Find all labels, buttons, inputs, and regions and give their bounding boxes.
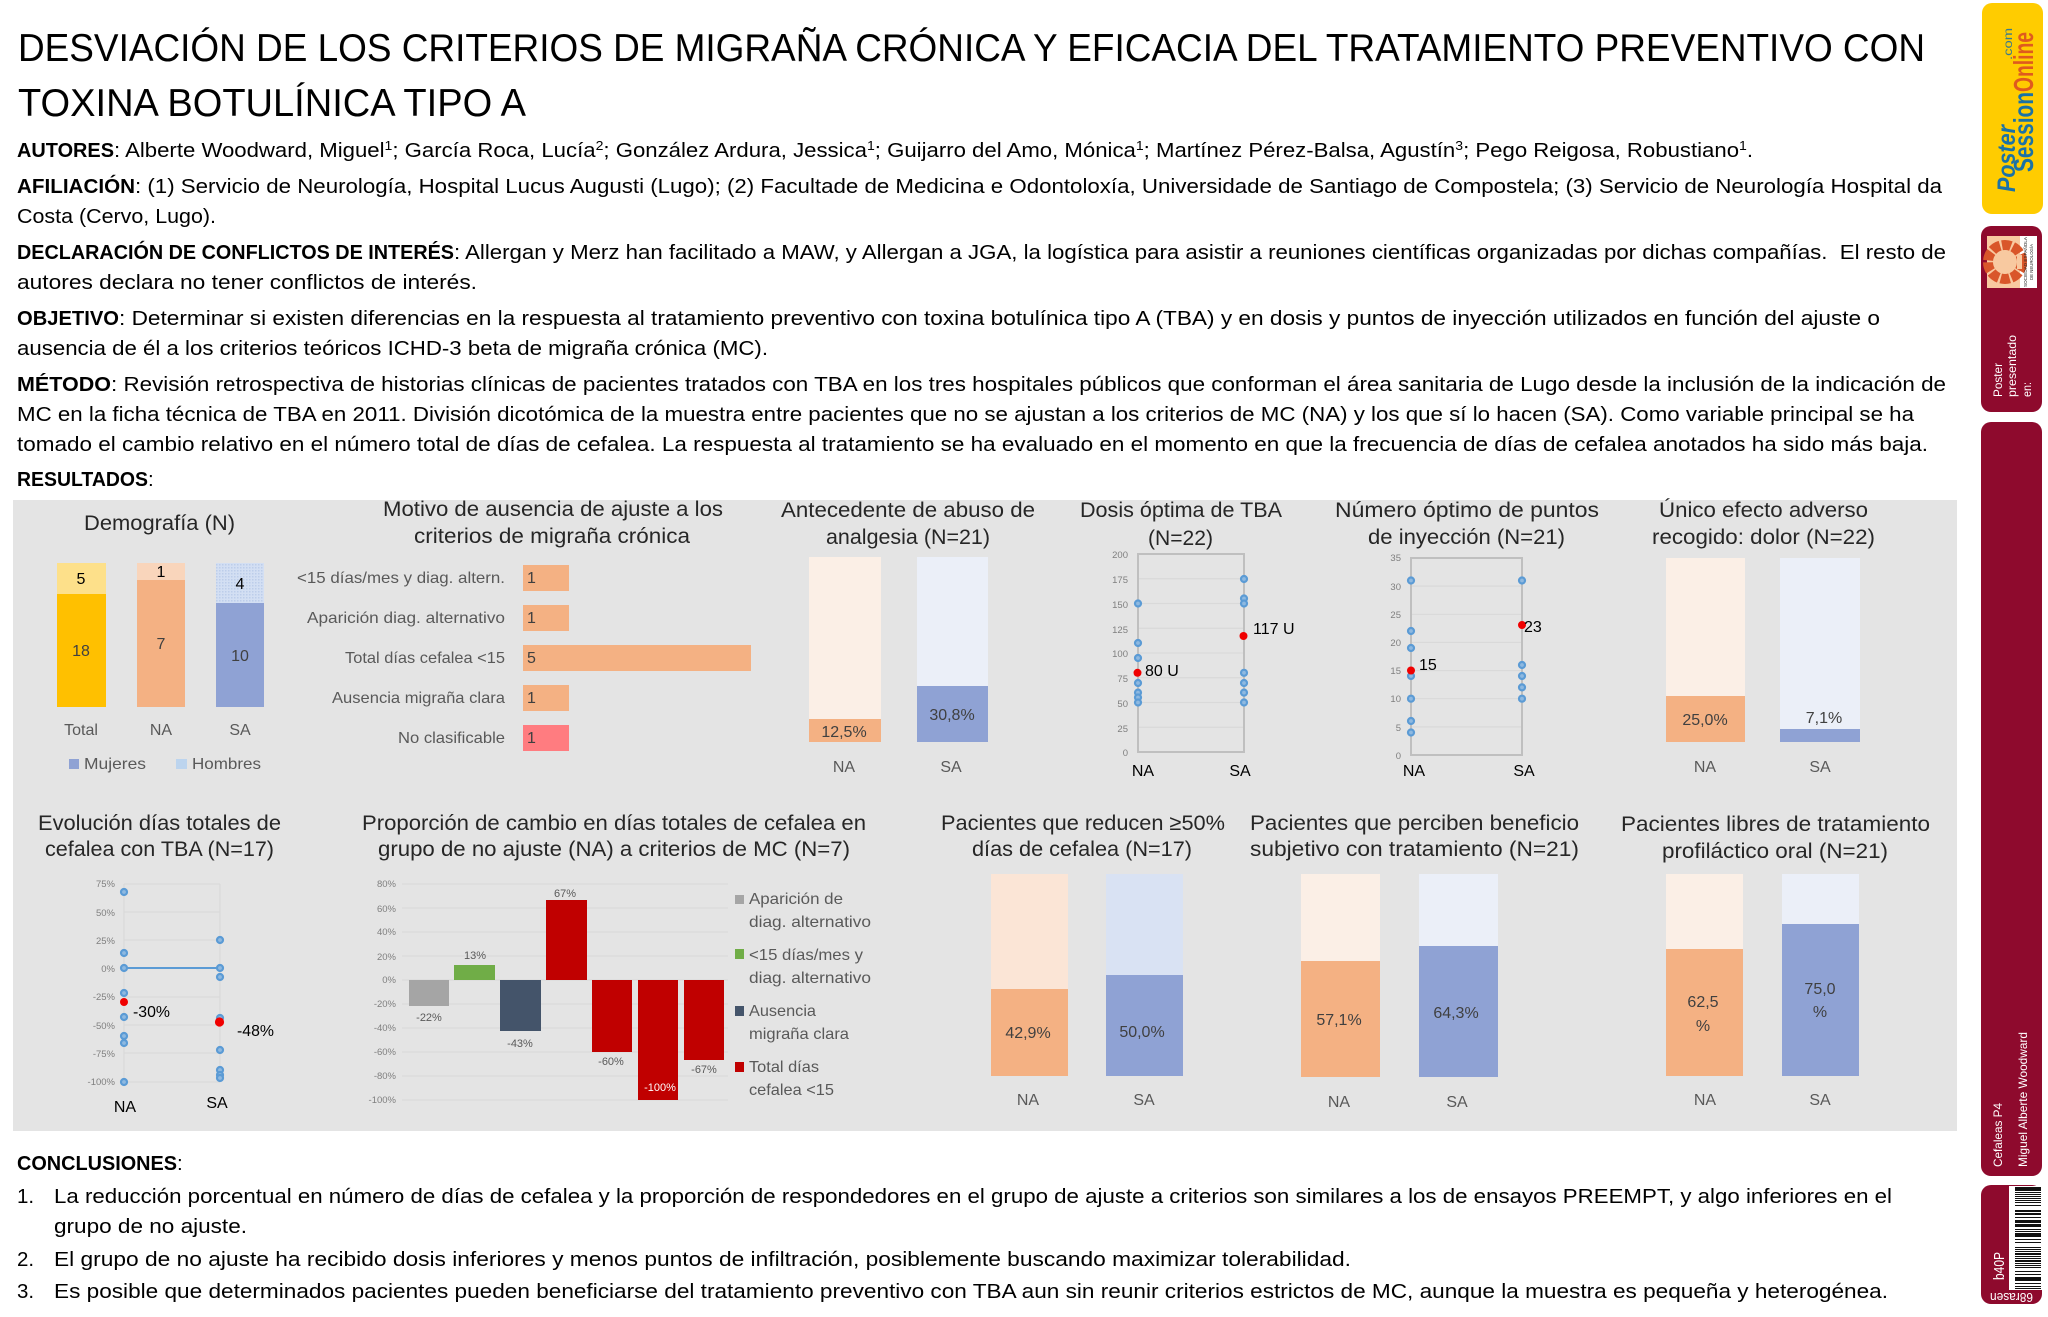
sidebar: author block: Cefaleas P4 [1991,1103,2005,1167]
text block: conclusiones [17,1152,1892,1303]
chart: único efecto adverso: recogido: dolor (N=22) [1652,525,1875,549]
chart: número óptimo de puntos de inyección: SA [1513,763,1535,780]
sidebar: congress block: DE NEUROLOGÍA [2028,244,2034,280]
chart: beneficio subjetivo: NA [1328,1094,1350,1111]
chart: proporción de cambio: 67% [554,888,576,900]
sidebar: poster session online logo [1982,3,2043,214]
chart: único efecto adverso: SA [1809,759,1831,776]
chart: proporción de cambio: 13% [464,950,486,962]
text block: autores: ; García Roca, Lucía [392,139,596,162]
chart: dosis óptima de TBA: 200 [1112,550,1128,561]
chart: número óptimo de puntos de inyección: 20 [1390,638,1401,649]
chart: dosis óptima de TBA: SA [1229,763,1251,780]
chart: proporción de cambio: 0% [382,975,397,986]
chart: pacientes que reducen ≥50%: NA [1017,1092,1039,1109]
chart: dosis óptima de TBA: 0 [1123,748,1128,759]
panel: resultados [13,497,1957,1131]
chart: evolución días totales: SA [206,1095,228,1112]
chart: abuso de analgesia [781,498,1035,776]
chart: proporción de cambio: -60% [598,1056,624,1068]
chart: proporción de cambio: cefalea <15 [749,1082,834,1099]
chart: proporción de cambio: -40% [374,1023,397,1034]
chart: evolución días totales: -30% [133,1004,170,1021]
text block: autores: ; Guijarro del Amo, Mónica [875,139,1137,162]
chart: motivo de ausencia de ajuste: No clasificable [398,730,505,747]
chart: número óptimo de puntos de inyección: 35 [1390,553,1401,564]
text block: objetivo: : Determinar si existen diferencias en la respuesta al tratamiento preventivo con toxina botulínica tipo A (TBA) y en dosis y puntos de inyección utilizados en función del ajuste o [119,307,1880,330]
chart: abuso de analgesia: Antecedente de abuso de [781,498,1035,522]
text block: autores: 1 [1739,138,1747,153]
text block: autores: 1 [1136,138,1144,153]
text block: autores: 1 [385,138,392,153]
chart: demografía: 5 [77,571,86,588]
chart: abuso de analgesia: analgesia (N=21) [826,525,990,549]
text block: método: : Revisión retrospectiva de historias clínicas de pacientes tratados con TBA en los tres hospitales públicos que conforman el área sanitaria de Lugo desde la inclusión de la indicación de [111,373,1946,396]
chart: dosis óptima de TBA: (N=22) [1148,526,1213,550]
chart: único efecto adverso: NA [1694,759,1716,776]
chart: proporción de cambio: diag. alternativo [749,914,871,931]
chart: proporción de cambio: 80% [377,879,397,890]
text block: autores: ; Pego Reigosa, Robustiano [1463,139,1739,162]
chart: número óptimo de puntos de inyección [1335,498,1599,780]
chart: motivo de ausencia de ajuste [297,497,751,751]
text block: conflictos de interés: : Allergan y Merz han facilitado a MAW, y Allergan a JGA, la logística para asistir a reuniones científicas organizadas por dichas compañías. El resto de [454,241,1946,264]
chart: demografía: NA [150,722,172,739]
chart: número óptimo de puntos de inyección: 15 [1419,657,1437,674]
chart: proporción de cambio: Ausencia [749,1003,816,1020]
chart: demografía: 1 [157,564,166,581]
chart: demografía: Total [64,722,98,739]
text block: autores: 1 [867,138,875,153]
text block: autores: . [1747,139,1753,162]
chart: número óptimo de puntos de inyección: 30 [1390,582,1401,593]
chart: dosis óptima de TBA: 80 U [1145,663,1179,680]
chart: número óptimo de puntos de inyección: Número óptimo de puntos [1335,498,1599,522]
heading: resultados: RESULTADOS [17,468,148,491]
chart: demografía: Hombres [192,756,261,773]
sidebar: congress block: Poster [1991,363,2005,397]
chart: beneficio subjetivo: 64,3% [1433,1005,1479,1022]
text block: conclusiones: 1. [17,1185,34,1208]
chart: proporción de cambio: 60% [377,904,397,915]
chart: demografía: 18 [72,643,90,660]
text block: conclusiones: La reducción porcentual en número de días de cefalea y la proporción de respondedores en el grupo de ajuste a criterios son similares a los de ensayos PREEMPT, y algo inferiores en el [54,1185,1892,1208]
chart: proporción de cambio: -100% [369,1095,397,1106]
chart: proporción de cambio: -80% [374,1071,397,1082]
chart: evolución días totales: -100% [88,1077,116,1088]
chart: libres de tratamiento profiláctico: profiláctico oral (N=21) [1662,839,1888,863]
sidebar: poster session online logo: Online [2008,32,2039,92]
text block: conclusiones: El grupo de no ajuste ha recibido dosis inferiores y menos puntos de infiltración, posiblemente buscando maximizar tolerabilidad. [54,1248,1351,1271]
text block: autores: 3 [1455,138,1463,153]
sidebar: congress block: presentado [2005,335,2019,397]
text block: autores: 2 [596,138,603,153]
chart: demografía: SA [229,722,251,739]
chart: dosis óptima de TBA: 175 [1112,575,1128,586]
chart: pacientes que reducen ≥50%: días de cefalea (N=17) [972,837,1192,861]
chart: proporción de cambio: <15 días/mes y [749,947,863,964]
sidebar: poster session online logo: Session [2008,92,2039,172]
text block: afiliación: : (1) Servicio de Neurología, Hospital Lucus Augusti (Lugo); (2) Facultade de Medicina e Odontoloxía, Universidade de Santiago de Compostela; (3) Servicio de Neurología Hospital da [135,175,1943,198]
text block: método: tomado el cambio relativo en el número total de días de cefalea. La respuesta al tratamiento se ha evaluado en el momento en que la frecuencia de días de cefalea anotados ha sido más baja. [17,433,1928,456]
chart: demografía: 7 [157,636,166,653]
chart: evolución días totales: 0% [101,964,116,975]
text block: método [17,373,1946,456]
chart: único efecto adverso: 7,1% [1806,710,1842,727]
chart: dosis óptima de TBA: 100 [1112,649,1128,660]
chart: dosis óptima de TBA: 75 [1117,674,1128,685]
chart: motivo de ausencia de ajuste: <15 días/mes y diag. altern. [297,570,505,587]
chart: evolución días totales: -25% [93,992,116,1003]
chart: motivo de ausencia de ajuste: Total días cefalea <15 [345,650,505,667]
sidebar: barcode block: b40P [1991,1252,2008,1280]
sidebar: author block: Miguel Alberte Woodward [2016,1032,2030,1167]
chart: evolución días totales: 50% [96,908,116,919]
sidebar: barcode block: 68rasen [1990,1290,2033,1304]
text block: autores: : Alberte Woodward, Miguel [114,139,364,162]
text block: conclusiones: CONCLUSIONES [17,1152,177,1175]
chart: dosis óptima de TBA: 50 [1117,699,1128,710]
chart: pacientes que reducen ≥50%: 42,9% [1005,1025,1051,1042]
text block: método: MC en la ficha técnica de TBA en 2011. División dicotómica de la muestra entre pacientes que no se ajustan a los criterios de MC (NA) y los que sí lo hacen (SA). Como variable principal se ha [17,403,1915,426]
chart: libres de tratamiento profiláctico: Pacientes libres de tratamiento [1621,812,1930,836]
text block: autores: ; González Ardura, Jessica [603,139,868,162]
sidebar: congress block [1981,226,2042,412]
text block: objetivo: ausencia de él a los criterios teóricos ICHD-3 beta de migraña crónica (MC). [17,337,768,360]
sidebar: barcode block [1981,1185,2042,1304]
text block: conflictos de interés: DECLARACIÓN DE CONFLICTOS DE INTERÉS [17,240,454,264]
chart: evolución días totales: -75% [93,1049,116,1060]
chart: dosis óptima de TBA: 117 U [1253,621,1295,638]
chart: evolución días totales: -50% [93,1021,116,1032]
chart: motivo de ausencia de ajuste: 1 [527,690,536,707]
chart: proporción de cambio: -20% [374,999,397,1010]
text block: conclusiones: Es posible que determinados pacientes pueden beneficiarse del tratamiento preventivo con TBA aun sin reunir criterios estrictos de MC, aunque la muestra es pequeña y heterogénea. [54,1280,1888,1303]
text block: autores: AUTORES [17,139,114,162]
chart: proporción de cambio: -60% [374,1047,397,1058]
text block: afiliación: Costa (Cervo, Lugo). [17,205,216,228]
chart: dosis óptima de TBA [1080,498,1295,780]
title: TOXINA BOTULÍNICA TIPO A [18,82,526,125]
text block: objetivo: OBJETIVO [17,307,119,330]
chart: proporción de cambio: Total días [749,1059,819,1076]
chart: número óptimo de puntos de inyección: 23 [1524,619,1542,636]
chart: pacientes que reducen ≥50% [941,811,1225,1109]
chart: abuso de analgesia: 30,8% [929,707,975,724]
chart: proporción de cambio [362,811,871,1106]
chart: número óptimo de puntos de inyección: 15 [1390,666,1401,677]
text block: afiliación [17,174,1943,228]
text block: conclusiones: 2. [17,1248,34,1271]
chart: abuso de analgesia: 12,5% [821,724,867,741]
heading: resultados: : [148,468,154,491]
chart: proporción de cambio: grupo de no ajuste (NA) a criterios de MC (N=7) [378,837,850,861]
chart: proporción de cambio: -22% [416,1012,442,1024]
chart: número óptimo de puntos de inyección: 0 [1396,751,1401,762]
chart: proporción de cambio: -67% [691,1064,717,1076]
chart: evolución días totales: cefalea con TBA (N=17) [45,837,274,861]
chart: evolución días totales: 25% [96,936,116,947]
chart: beneficio subjetivo: SA [1446,1094,1468,1111]
chart: número óptimo de puntos de inyección: 10 [1390,694,1401,705]
chart: demografía: Demografía (N) [84,511,235,535]
chart: pacientes que reducen ≥50%: 50,0% [1119,1024,1165,1041]
chart: proporción de cambio: diag. alternativo [749,970,871,987]
chart: pacientes que reducen ≥50%: Pacientes que reducen ≥50% [941,811,1225,835]
chart: abuso de analgesia: SA [940,759,962,776]
chart: motivo de ausencia de ajuste: Motivo de ausencia de ajuste a los [383,497,723,521]
chart: demografía: 4 [236,576,245,593]
chart: libres de tratamiento profiláctico: % [1696,1018,1710,1035]
title [18,27,1925,125]
chart: proporción de cambio: 20% [377,952,397,963]
chart: número óptimo de puntos de inyección: 5 [1396,723,1401,734]
text block: conflictos de interés [17,240,1946,294]
sidebar: author block [1981,422,2042,1176]
chart: libres de tratamiento profiláctico: SA [1809,1092,1831,1109]
chart: beneficio subjetivo: 57,1% [1316,1012,1362,1029]
chart: evolución días totales: -48% [237,1023,274,1040]
chart: número óptimo de puntos de inyección: de inyección (N=21) [1368,525,1565,549]
chart: motivo de ausencia de ajuste: 1 [527,730,536,747]
chart: dosis óptima de TBA: NA [1132,763,1154,780]
chart: número óptimo de puntos de inyección: NA [1403,763,1425,780]
title: DESVIACIÓN DE LOS CRITERIOS DE MIGRAÑA CRÓNICA Y EFICACIA DEL TRATAMIENTO PREVENTIVO CON [18,27,1925,70]
text block: autores: ; Martínez Pérez-Balsa, Agustín [1144,139,1455,162]
chart: abuso de analgesia: NA [833,759,855,776]
text block: autores [17,138,1753,162]
chart: proporción de cambio: 40% [377,927,397,938]
chart: motivo de ausencia de ajuste: 5 [527,650,536,667]
chart: motivo de ausencia de ajuste: 1 [527,570,536,587]
chart: beneficio subjetivo [1250,811,1579,1111]
text block: objetivo [17,307,1880,360]
chart: demografía: 10 [231,648,249,665]
chart: proporción de cambio: Aparición de [749,891,843,908]
text block: afiliación: AFILIACIÓN [17,174,135,198]
chart: evolución días totales: NA [114,1099,136,1116]
chart: proporción de cambio: migraña clara [749,1026,849,1043]
chart: libres de tratamiento profiláctico: 62,5 [1687,994,1719,1011]
chart: dosis óptima de TBA: 150 [1112,600,1128,611]
text block: método: MÉTODO [17,373,111,396]
chart: beneficio subjetivo: Pacientes que perciben beneficio [1250,811,1579,835]
chart: motivo de ausencia de ajuste: Ausencia migraña clara [332,690,505,707]
sidebar: poster session online logo: .com [2001,28,2015,60]
text block: conclusiones: : [177,1152,183,1175]
chart: número óptimo de puntos de inyección: 25 [1390,610,1401,621]
text block: conflictos de interés: autores declara no tener conflictos de interés. [17,271,477,294]
chart: beneficio subjetivo: subjetivo con tratamiento (N=21) [1250,837,1579,861]
chart: demografía [57,511,264,773]
chart: proporción de cambio: -43% [507,1038,533,1050]
chart: evolución días totales: 75% [96,879,116,890]
sidebar: poster session online logo: Poster [1993,124,2021,192]
chart: demografía: Mujeres [84,756,146,773]
chart: motivo de ausencia de ajuste: 1 [527,610,536,627]
chart: único efecto adverso [1652,497,1875,776]
chart: evolución días totales [38,811,281,1116]
chart: dosis óptima de TBA: 125 [1112,625,1128,636]
text block: conclusiones: 3. [17,1280,34,1303]
chart: evolución días totales: Evolución días totales de [38,811,281,835]
chart: dosis óptima de TBA: 25 [1117,724,1128,735]
chart: proporción de cambio: -100% [644,1082,676,1094]
sidebar: congress block: en: [2020,382,2034,397]
chart: libres de tratamiento profiláctico: 75,0 [1804,981,1836,998]
chart: único efecto adverso: 25,0% [1682,712,1728,729]
text block: conclusiones: grupo de no ajuste. [54,1215,247,1238]
chart: dosis óptima de TBA: Dosis óptima de TBA [1080,498,1283,522]
chart: proporción de cambio: Proporción de cambio en días totales de cefalea en [362,811,866,835]
sidebar: congress block: SOCIEDAD ESPAÑOLA [2022,237,2028,287]
chart: libres de tratamiento profiláctico: NA [1694,1092,1716,1109]
chart: único efecto adverso: Único efecto adverso [1659,497,1868,522]
chart: motivo de ausencia de ajuste: Aparición diag. alternativo [307,610,505,627]
chart: libres de tratamiento profiláctico: % [1813,1004,1827,1021]
chart: libres de tratamiento profiláctico [1621,812,1930,1109]
chart: motivo de ausencia de ajuste: criterios de migraña crónica [414,524,690,548]
chart: pacientes que reducen ≥50%: SA [1133,1092,1155,1109]
